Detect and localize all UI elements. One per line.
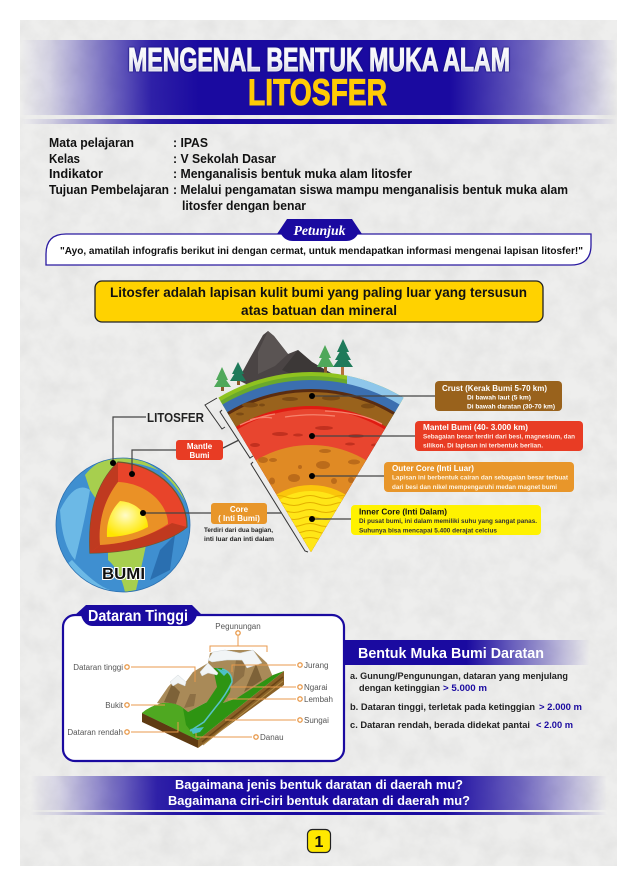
lesson information: : Melalui pengamatan siswa mampu menganalisis bentuk muka alam [173, 183, 568, 197]
earth layers wedge [214, 331, 404, 552]
bottom question banner: Bagaimana jenis bentuk daratan di daerah mu? [175, 778, 463, 792]
header banner [20, 40, 617, 124]
label: mantle bumi: Bumi [190, 451, 210, 460]
instructions tab: Petunjuk [294, 224, 346, 239]
landform list: c. Dataran rendah, berada didekat pantai [350, 720, 530, 731]
cut-away: crust face [90, 462, 118, 553]
outer core texture [258, 449, 360, 484]
label: inner core: Suhunya bisa mencapai 5.400 derajat celcius [359, 528, 498, 534]
label: mantle [415, 421, 583, 451]
layer brackets [205, 398, 308, 552]
landform list: > 5.000 m [443, 683, 487, 694]
mountain range [157, 650, 273, 712]
river and lake [190, 669, 232, 731]
label: crust [435, 381, 562, 411]
landform list: dengan ketinggian [359, 683, 440, 694]
globe connectors [110, 417, 211, 516]
crust texture [236, 396, 375, 416]
label: core: ( Inti Bumi) [218, 514, 260, 523]
lesson information: Tujuan Pembelajaran [49, 183, 169, 197]
oceans [60, 488, 90, 560]
wedge layers [218, 372, 404, 552]
definition box: atas batuan dan mineral [241, 302, 397, 318]
lesson information: Mata pelajaran [49, 136, 134, 150]
lesson information: Kelas [49, 152, 80, 166]
cut-away: inner core [107, 501, 148, 537]
landscape block [142, 650, 284, 748]
green land [142, 668, 284, 740]
landscape label text: Jurang [304, 661, 328, 670]
label: outer core: Lapisan ini berbentuk cairan dan sebagaian besar terbuat [392, 476, 568, 482]
mountains [238, 331, 336, 386]
instructions box [46, 219, 591, 265]
lesson information [49, 136, 568, 213]
cut-away: outer core [100, 482, 168, 545]
label: mantle: Sebagaian besar terdiri dari besi, magnesium, dan [423, 434, 575, 440]
label: inner core: Di pusat bumi, ini dalam memiliki suhu yang sangat panas. [359, 519, 537, 525]
landscape label text: Ngarai [304, 683, 328, 692]
landscape label text: Dataran tinggi [73, 663, 123, 672]
core caption [204, 527, 275, 543]
lesson information: : Menganalisis bentuk muka alam litosfer [173, 167, 412, 181]
globe [56, 417, 211, 592]
label: litosfer: LITOSFER [147, 410, 205, 425]
snow caps [170, 675, 186, 686]
label: core [211, 503, 267, 524]
label: inner core: Inner Core (Inti Dalam) [359, 506, 447, 516]
landscape label text: Bukit [105, 701, 124, 710]
label: core: Core [230, 505, 249, 514]
label: crust: Di bawah laut (5 km) [467, 396, 531, 402]
land [85, 458, 186, 502]
instructions tab [277, 219, 362, 241]
definition box [95, 281, 543, 322]
label: crust: Di bawah daratan (30-70 km) [467, 404, 555, 410]
label: outer core: dari besi dan nikel mempengaruhi medan magnet bumi [392, 485, 557, 491]
instructions text: "Ayo, amatilah infografis berikut ini dengan cermat, untuk mendapatkan informasi mengenai lapisan litosfer!" [60, 245, 583, 257]
label: crust: Crust (Kerak Bumi 5-70 km) [442, 383, 547, 393]
landform list: > 2.000 m [539, 702, 582, 713]
landscape labels [125, 631, 302, 739]
lesson information: Indikator [49, 167, 103, 181]
section heading: bentuk muka bumi daratan [343, 640, 590, 665]
landscape label text: Danau [260, 733, 284, 742]
lesson information: : V Sekolah Dasar [173, 152, 276, 166]
mantle texture [250, 426, 379, 447]
landform list: b. Dataran tinggi, terletak pada ketinggian [350, 702, 535, 713]
trees [214, 339, 353, 391]
landscape label text: Pegunungan [215, 622, 261, 631]
label: mantle bumi: Mantle [187, 442, 213, 451]
landscape label text: Sungai [304, 716, 329, 725]
label: inner core [351, 505, 541, 535]
panel tab: Dataran Tinggi [88, 608, 188, 625]
globe caption: BUMI [102, 566, 145, 583]
cut-away: mantle [90, 462, 187, 553]
page number: 1 [315, 834, 324, 851]
landscape label text: Dataran rendah [67, 728, 123, 737]
bottom question banner: Bagaimana ciri-ciri bentuk daratan di daerah mu? [168, 794, 470, 808]
label: outer core [384, 462, 574, 492]
panel: dataran tinggi [63, 605, 344, 761]
subtitle: LITOSFER [248, 72, 387, 113]
lesson information: : IPAS [173, 136, 208, 150]
label: mantle: Mantel Bumi (40- 3.000 km) [423, 422, 528, 432]
section heading: bentuk muka bumi daratan: Bentuk Muka Bumi Daratan [358, 646, 544, 662]
landform list: < 2.00 m [536, 720, 573, 731]
label: outer core: Outer Core (Inti Luar) [392, 463, 474, 473]
panel tab [75, 605, 202, 626]
inner core waves [276, 495, 345, 540]
landscape label text: Lembah [304, 695, 333, 704]
landform list [350, 671, 582, 731]
label: mantle: silikon. Di lapisan ini terbentuk berlian. [423, 444, 543, 450]
definition box: Litosfer adalah lapisan kulit bumi yang paling luar yang tersusun [110, 284, 527, 300]
label: mantle bumi [176, 440, 223, 460]
core caption: Terdiri dari dua bagian, [204, 527, 273, 534]
bottom question banner [30, 776, 607, 815]
connector lines and dots [223, 393, 435, 522]
landscape label text [67, 622, 333, 742]
page number [308, 830, 330, 852]
lesson information: litosfer dengan benar [182, 199, 306, 213]
landform list: a. Gunung/Pengunungan, dataran yang menjulang [350, 671, 568, 682]
core caption: inti luar dan inti dalam [204, 536, 275, 543]
